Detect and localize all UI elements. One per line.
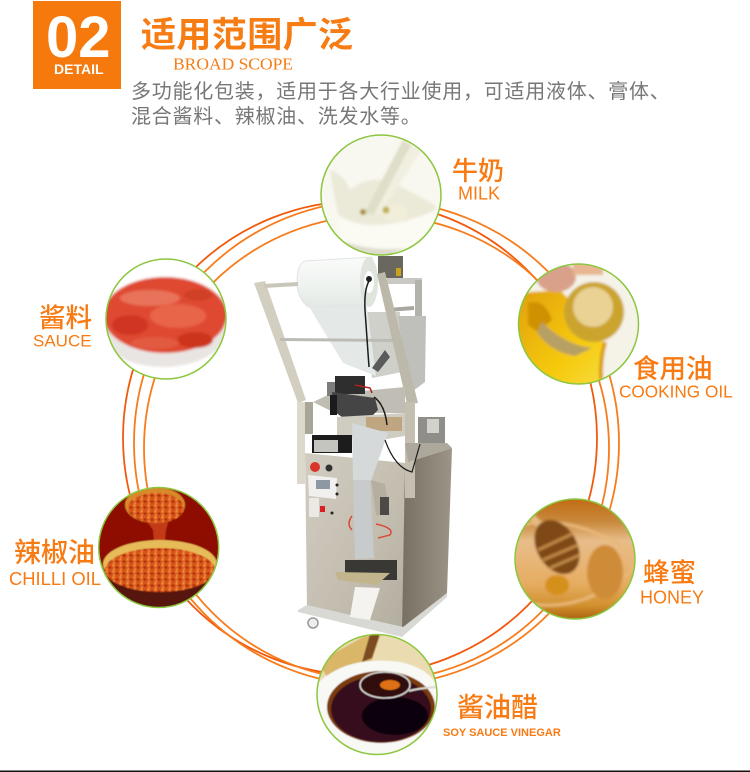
motor	[327, 376, 378, 417]
wheel	[308, 618, 318, 628]
motor cable	[374, 397, 387, 425]
description text: 混合酱料、辣椒油、洗发水等。	[131, 105, 422, 128]
label: sauce	[33, 303, 92, 350]
photo circle: milk	[320, 134, 442, 258]
description text	[131, 80, 670, 128]
cross bar	[280, 338, 400, 342]
description text: 多功能化包装，适用于各大行业使用，可适用液体、膏体、	[131, 80, 670, 103]
section badge: DETAIL	[54, 61, 104, 77]
white control box	[337, 413, 405, 440]
photo circle: chilli oil	[98, 487, 219, 614]
label: milk	[452, 156, 504, 204]
label: honey	[640, 558, 704, 608]
cable	[365, 281, 369, 367]
film roll	[297, 257, 378, 376]
sealing jaw	[335, 560, 397, 585]
machine upper frame	[367, 256, 422, 378]
label: chilli oil	[9, 538, 101, 589]
funnel plate	[313, 387, 405, 413]
label: soy sauce vinegar: SOY SAUCE VINEGAR	[443, 727, 561, 739]
label: soy sauce vinegar	[443, 693, 561, 739]
frame interior	[305, 402, 313, 434]
packaging machine	[254, 256, 452, 637]
label: cooking oil: COOKING OIL	[619, 382, 733, 402]
label: sauce: 酱料	[39, 303, 92, 333]
label: honey: 蜂蜜	[643, 558, 696, 588]
subtitle: BROAD SCOPE	[173, 54, 293, 74]
side panel	[402, 448, 452, 633]
label: milk: 牛奶	[452, 156, 504, 186]
label: milk: MILK	[458, 184, 500, 204]
orange rings	[123, 200, 619, 686]
hopper	[398, 316, 426, 391]
label: chilli oil: CHILLI OIL	[9, 568, 101, 589]
photo circle: sauce	[101, 258, 227, 381]
label: honey: HONEY	[640, 588, 704, 608]
photo circle: honey	[514, 498, 636, 620]
control panel	[308, 462, 338, 517]
section badge	[33, 1, 121, 89]
label: chilli oil: 辣椒油	[14, 538, 95, 568]
base plate	[298, 593, 447, 637]
right mechanism	[385, 417, 452, 472]
label: soy sauce vinegar: 酱油醋	[457, 693, 538, 723]
label: cooking oil	[619, 354, 733, 402]
sensor	[372, 350, 390, 372]
left frame arm	[254, 281, 306, 403]
front panel	[305, 453, 405, 627]
label: cooking oil: 食用油	[633, 354, 712, 384]
title: 适用范围广泛	[141, 16, 353, 55]
left post	[297, 402, 305, 484]
photo circle: cooking oil	[517, 262, 640, 386]
photo circle: soy sauce vinegar	[316, 634, 440, 756]
section badge: 02	[46, 5, 111, 70]
right post	[405, 402, 415, 498]
bag former	[352, 423, 390, 559]
label: sauce: SAUCE	[33, 332, 92, 350]
hanging bag	[350, 587, 380, 620]
black box	[312, 435, 352, 453]
wires	[349, 516, 391, 538]
right frame arm	[377, 272, 418, 404]
